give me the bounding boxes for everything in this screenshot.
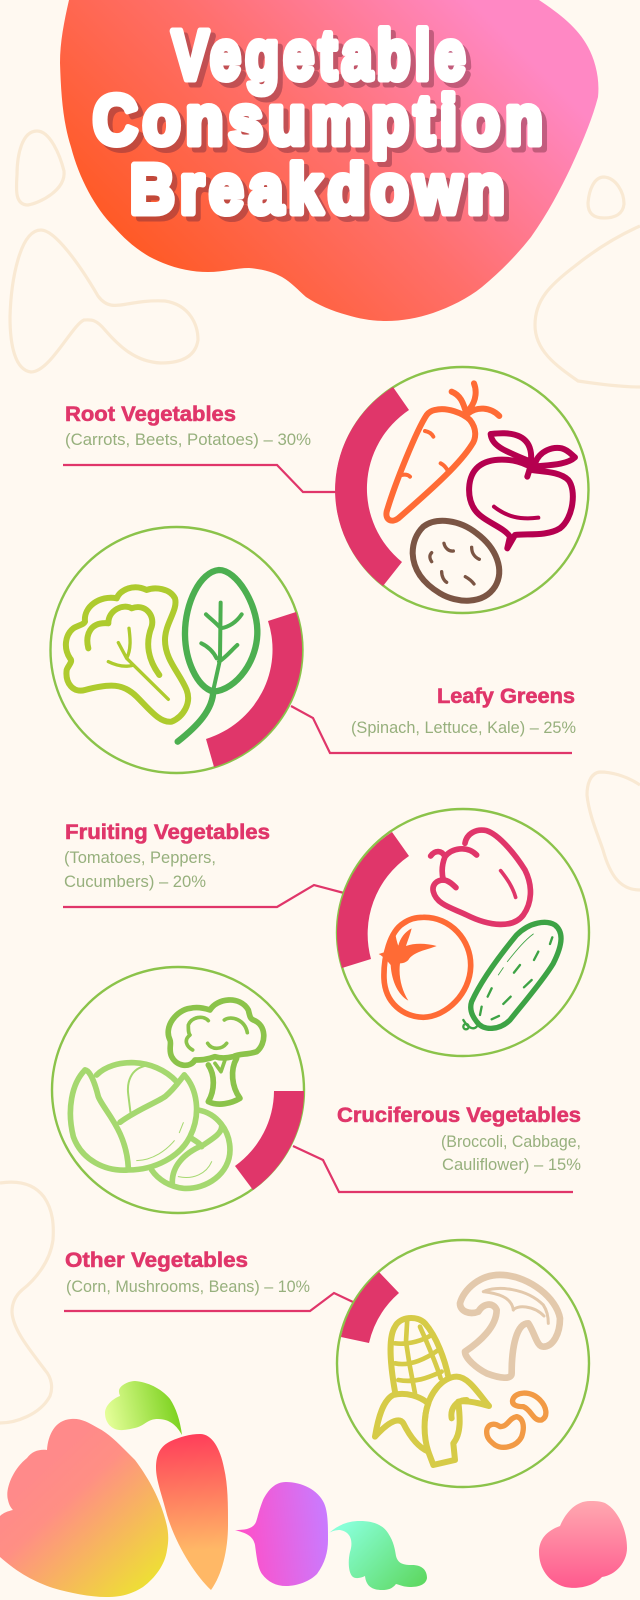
icon: cucumber: [463, 922, 561, 1029]
panel: leafy greens: [50, 527, 576, 773]
connector line: [63, 465, 336, 492]
15% arc: [235, 1091, 304, 1190]
icon: lettuce: [66, 587, 188, 722]
text: fruiting vegetables detail: [64, 848, 216, 891]
text: cruciferous vegetables detail: Cauliflower) – 15%: [442, 1155, 581, 1174]
circle: [337, 809, 589, 1056]
icon: potato: [413, 521, 499, 601]
title: [93, 16, 548, 228]
icon: carrot: [386, 383, 499, 521]
text: fruiting vegetables detail: Cucumbers) – 20%: [64, 872, 206, 891]
decoration: gradient carrot shape: [156, 1434, 228, 1590]
30% arc: [335, 387, 409, 586]
heading: leafy greens: Leafy Greens: [437, 684, 575, 708]
text: root vegetables detail: (Carrots, Beets, Potatoes) – 30%: [65, 430, 311, 449]
20% arc: [337, 832, 409, 968]
icon: beet: [469, 433, 575, 548]
icon: mushroom: [460, 1275, 560, 1378]
decoration: gradient cabbage shape: [0, 1419, 168, 1597]
heading: root vegetables: Root Vegetables: [65, 402, 236, 426]
title blob: [60, 0, 598, 321]
panel: root vegetables: [63, 367, 588, 613]
title: Breakdown: [130, 150, 510, 228]
10% arc: [341, 1272, 399, 1343]
icon: cabbage: [70, 1063, 230, 1188]
decoration: gradient leaf shape: [105, 1381, 182, 1435]
circle: [336, 367, 588, 613]
connector line: [64, 1293, 353, 1311]
icon: pepper: [431, 830, 530, 924]
icon: corn: [375, 1318, 489, 1465]
25% arc: [206, 612, 302, 767]
connector line: [293, 1146, 573, 1192]
connector line: [291, 706, 572, 753]
circle: [337, 1240, 589, 1487]
icon: tomato: [379, 917, 471, 1017]
heading: other vegetables: Other Vegetables: [65, 1248, 248, 1272]
icon: beans: [487, 1393, 546, 1447]
connector line: [63, 885, 344, 907]
panel: cruciferous vegetables: [52, 967, 581, 1213]
decoration: gradient pink shape: [539, 1501, 627, 1588]
decoration: gradient purple shape: [235, 1482, 328, 1586]
panel: other vegetables: [64, 1240, 589, 1487]
panel: fruiting vegetables: [63, 809, 589, 1056]
text: leafy greens detail: (Spinach, Lettuce, Kale) – 25%: [351, 718, 576, 737]
text: cruciferous vegetables detail: (Broccoli, Cabbage,: [441, 1132, 581, 1151]
title: Consumption: [93, 81, 548, 159]
icon: broccoli: [168, 1000, 264, 1104]
heading: fruiting vegetables: Fruiting Vegetables: [65, 820, 270, 844]
decoration: gradient teal shape: [329, 1521, 427, 1590]
text: cruciferous vegetables detail: [441, 1132, 581, 1174]
text: other vegetables detail: (Corn, Mushrooms, Beans) – 10%: [66, 1277, 310, 1296]
title: Vegetable: [172, 16, 470, 94]
circle: [52, 967, 304, 1213]
text: fruiting vegetables detail: (Tomatoes, Peppers,: [64, 848, 216, 867]
icon: spinach: [178, 570, 257, 742]
heading: cruciferous vegetables: Cruciferous Vegetables: [337, 1103, 581, 1127]
circle: [50, 527, 302, 773]
